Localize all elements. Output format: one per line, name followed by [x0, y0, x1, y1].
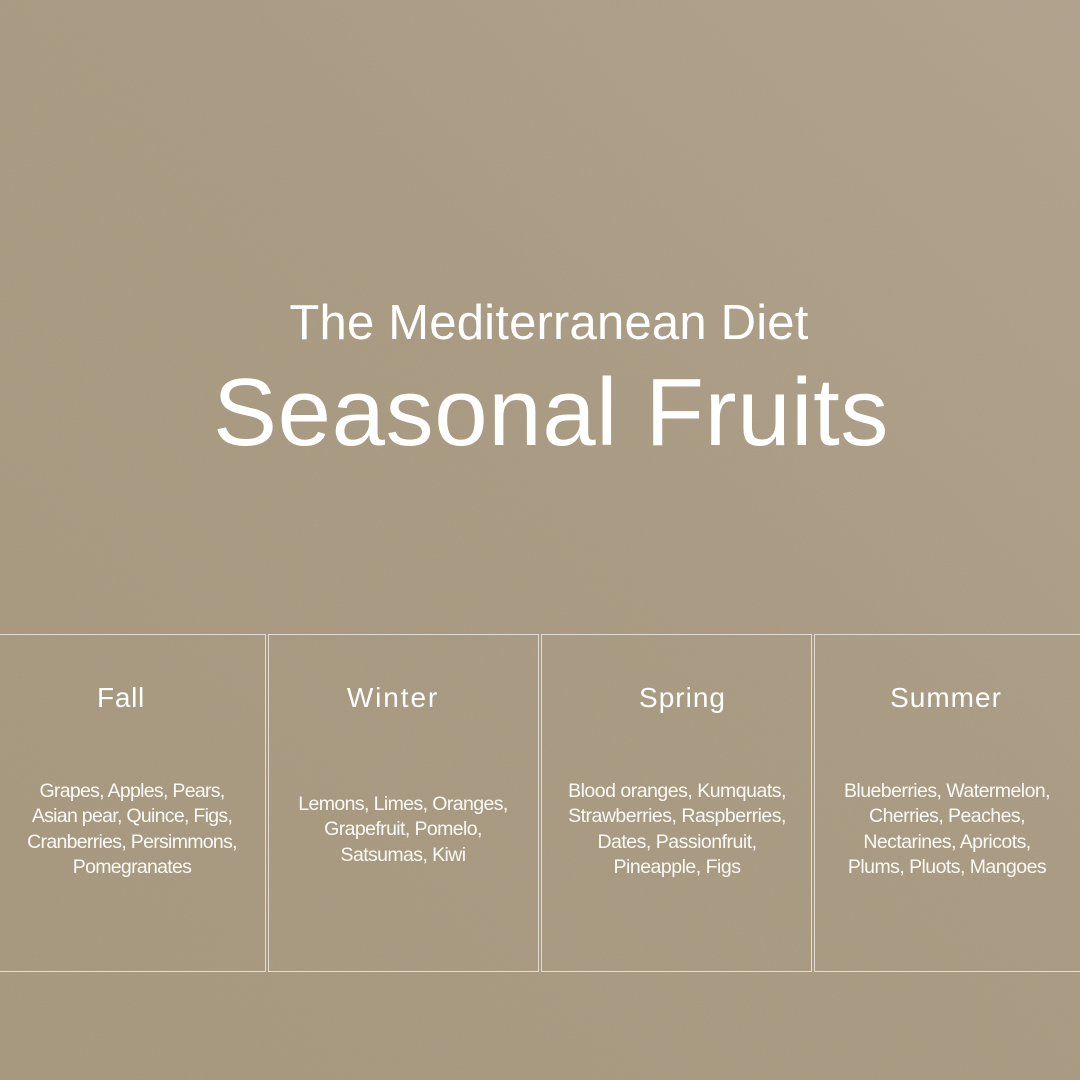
heading: winter: Winter [347, 682, 439, 713]
text: fall fruits: Pomegranates [73, 856, 191, 878]
text: spring fruits: Blood oranges, Kumquats, [568, 780, 786, 802]
text: winter fruits [298, 793, 508, 866]
text: spring fruits: Dates, Passionfruit, [597, 831, 757, 853]
panel: spring [541, 634, 812, 972]
heading: fall: Fall [97, 682, 145, 713]
panel: fall [0, 634, 266, 972]
text: summer fruits: Cherries, Peaches, [869, 805, 1025, 827]
text: summer fruits [844, 780, 1050, 878]
text: summer fruits: Blueberries, Watermelon, [844, 780, 1050, 802]
panel: summer [814, 634, 1080, 972]
text: spring fruits [568, 780, 786, 878]
panel: winter [268, 634, 539, 972]
text: fall fruits: Grapes, Apples, Pears, [39, 780, 225, 802]
text: spring fruits: Strawberries, Raspberries, [568, 805, 786, 827]
text: winter fruits: Lemons, Limes, Oranges, [298, 793, 508, 815]
title: Seasonal Fruits [213, 359, 889, 466]
text: spring fruits: Pineapple, Figs [614, 856, 740, 878]
text: fall fruits [27, 780, 237, 878]
heading: summer: Summer [890, 682, 1002, 713]
text: fall fruits: Cranberries, Persimmons, [27, 831, 237, 853]
heading: spring: Spring [639, 682, 726, 713]
subtitle: The Mediterranean Diet [289, 296, 809, 350]
text: summer fruits: Plums, Pluots, Mangoes [848, 856, 1046, 878]
text: winter fruits: Satsumas, Kiwi [341, 844, 465, 866]
text: summer fruits: Nectarines, Apricots, [863, 831, 1031, 853]
text: winter fruits: Grapefruit, Pomelo, [324, 818, 482, 840]
text: fall fruits: Asian pear, Quince, Figs, [32, 805, 232, 827]
